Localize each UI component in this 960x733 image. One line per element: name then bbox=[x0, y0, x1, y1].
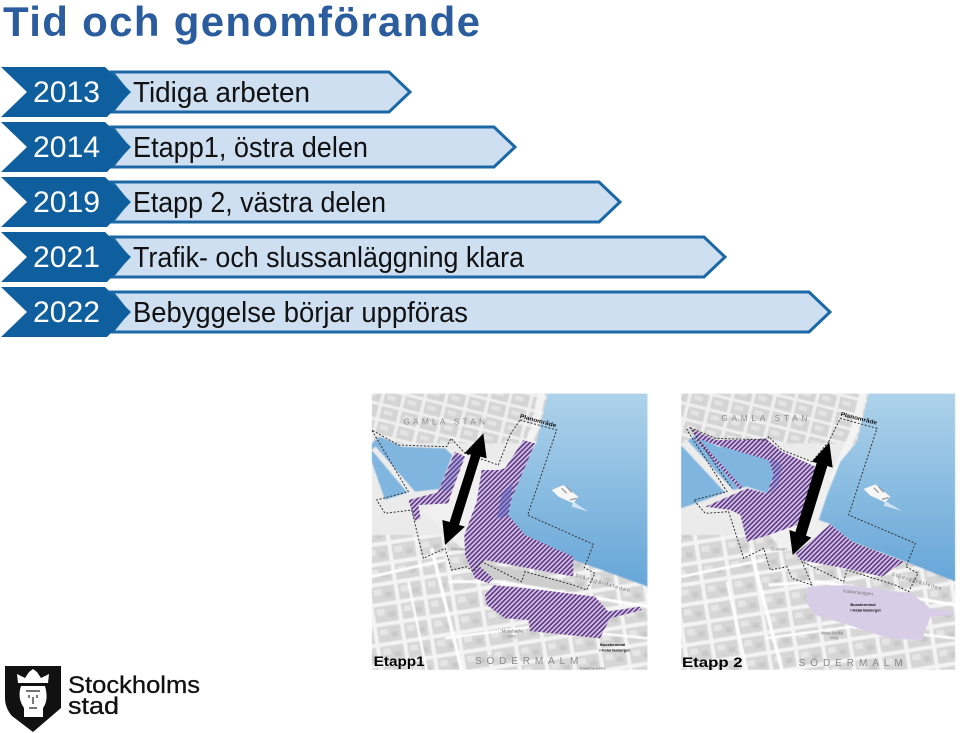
northern boundary bbox=[690, 428, 829, 462]
timeline row: 2019: 2019 bbox=[33, 186, 100, 219]
map labels: SÖDERMALM bbox=[799, 657, 903, 669]
wordmark: Stockholms bbox=[68, 672, 200, 699]
logo: Stockholms stad bbox=[5, 666, 200, 732]
timeline row: 2014 bbox=[1, 122, 515, 172]
map labels: Katarinavägen bbox=[843, 588, 874, 597]
map labels: Stadsgårdsleden bbox=[574, 572, 631, 594]
timeline row: 2013: 2013 bbox=[33, 76, 100, 109]
timeline row: 2021: 2021 bbox=[33, 241, 100, 274]
timeline row: 2022: Bebyggelse börjar uppföras bbox=[133, 297, 468, 329]
map labels: torg bbox=[508, 633, 516, 638]
map name: Etapp1 bbox=[374, 654, 425, 669]
map labels: Slussen bbox=[770, 547, 787, 552]
map labels bbox=[721, 411, 943, 669]
map labels: Bussterminal bbox=[600, 642, 625, 647]
timeline row: 2022: 2022 bbox=[33, 296, 100, 329]
map labels: Katarina kyrka bbox=[580, 665, 606, 670]
ship bbox=[552, 485, 588, 512]
map labels: Mosebacke bbox=[502, 629, 524, 634]
wordmark bbox=[68, 672, 200, 720]
map: Etapp 1 bbox=[372, 393, 648, 670]
timeline row: 2019: Etapp 2, västra delen bbox=[133, 187, 386, 219]
map labels: i Katarinaberget bbox=[599, 647, 630, 652]
map labels: SÖDERMALM bbox=[475, 655, 578, 667]
arrow bbox=[442, 433, 487, 545]
timeline row: 2013: Tidiga arbeten bbox=[133, 77, 310, 109]
map labels: Bussterminal bbox=[850, 602, 876, 607]
map labels: Slussen bbox=[451, 547, 468, 552]
map labels: Stadsgårdsleden bbox=[891, 571, 943, 592]
map labels: torg bbox=[830, 635, 838, 640]
map labels: GAMLA STAN bbox=[721, 413, 807, 423]
hatched areas bbox=[408, 440, 642, 638]
bus terminal area bbox=[805, 585, 954, 640]
icon: shield with crowned head bbox=[5, 666, 61, 732]
timeline row: 2021 bbox=[1, 232, 725, 282]
timeline row: 2022 bbox=[1, 287, 830, 337]
timeline row: 2014: Etapp1, östra delen bbox=[133, 132, 368, 164]
timeline bbox=[1, 67, 830, 337]
map labels: Planområde bbox=[519, 413, 557, 429]
hatched areas bbox=[690, 428, 904, 577]
timeline row: 2019 bbox=[1, 177, 620, 227]
map labels: GAMLA STAN bbox=[403, 416, 485, 426]
map labels: Mosebacke bbox=[821, 630, 844, 635]
planområde boundary bbox=[687, 418, 918, 592]
map name: Etapp 2 bbox=[682, 655, 743, 670]
timeline row: 2021: Trafik- och slussanläggning klara bbox=[133, 242, 525, 274]
timeline row: 2013 bbox=[1, 67, 410, 117]
wordmark: stad bbox=[68, 693, 119, 720]
timeline row: 2014: 2014 bbox=[33, 131, 100, 164]
arrow bbox=[789, 442, 833, 555]
map labels: i Katarinaberget bbox=[850, 607, 881, 612]
ship bbox=[864, 484, 902, 511]
map: Etapp 2 bbox=[681, 393, 955, 670]
map labels: Planområde bbox=[840, 411, 878, 427]
planområde boundary bbox=[372, 420, 595, 590]
map labels bbox=[403, 413, 631, 670]
